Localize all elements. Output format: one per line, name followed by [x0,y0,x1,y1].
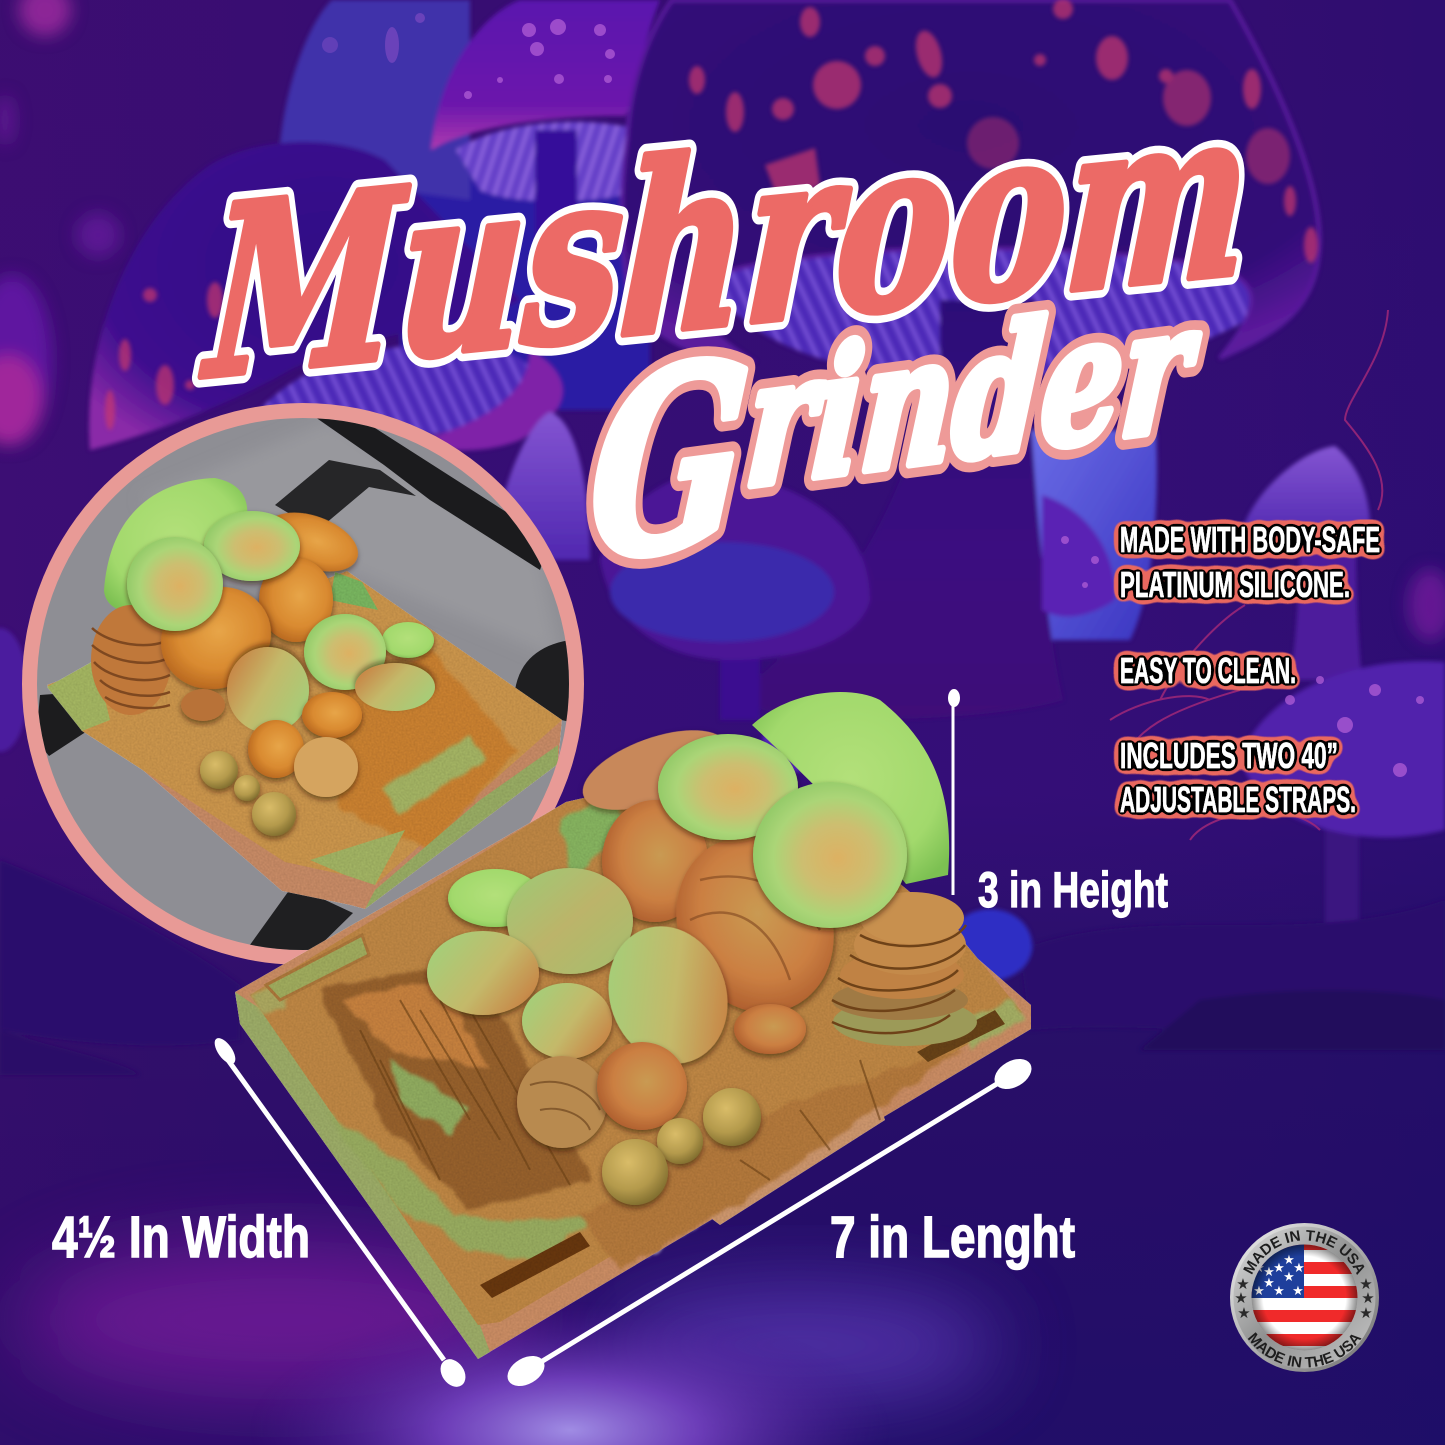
bokeh lights [0,0,1445,641]
inset mushroom cluster [91,478,435,836]
light blue stem [1030,430,1157,640]
inset slab [47,571,562,909]
right small mushroom [1042,495,1115,617]
badge: made in the USA: MADE IN THE USA [1248,1332,1362,1368]
title: Grinder [581,245,1207,618]
title: Mushroom: Mushroom [197,52,1257,432]
badge: made in the USA: ★ [1283,1270,1295,1285]
top middle stem and gills [456,122,640,201]
surface colour patches [250,790,1025,1270]
badge: made in the USA: ★ [1361,1289,1375,1307]
label: width: 4½ In Width [52,1205,310,1270]
badge: made in the USA: ★ [1359,1304,1373,1322]
badge: made in the USA: ★ [1234,1289,1248,1307]
title: Grinder: G [581,305,758,618]
badge: made in the USA: ★ [1292,1284,1304,1299]
feature list [1120,519,1380,820]
badge: made in the USA: ★ [1263,1245,1275,1260]
slab top surface [250,760,1022,1325]
mushroom stack at right [832,892,977,1046]
badge: made in the USA: ★ [1359,1275,1373,1293]
badge: made in the USA: ★ [1283,1253,1295,1268]
title: Grinder: G [581,305,758,618]
back and top caps [427,692,949,1205]
dimension line: height [948,689,960,895]
slab outer silhouette and side faces [235,760,1031,1359]
badge: made in the USA: ★ [1236,1275,1250,1293]
bark hatching [360,1000,880,1185]
top middle cap [431,0,660,150]
slots [266,935,369,1000]
badge: made in the USA: ★ [1263,1265,1275,1280]
left cap gills [250,344,536,440]
right small lavender mushroom [1290,530,1362,680]
badge: made in the USA: ★ [1273,1284,1285,1299]
main trunk [730,300,1063,719]
left edge mushrooms [0,628,28,752]
product inset circle [20,400,590,970]
feature: easy to clean: EASY TO CLEAN. [1120,650,1296,691]
badge: made in the USA: ★ [1237,1304,1251,1322]
big cap [622,0,1320,360]
blue distant cap [278,0,470,200]
cap spots [105,0,1318,430]
dimension line: length [502,1053,1037,1392]
straps [316,418,542,570]
badge: made in the USA: ★ [1253,1284,1265,1299]
label: length: 7 in Lenght [830,1205,1075,1270]
big cap gills [700,245,1290,375]
title: Grinder: rinder [740,263,1206,528]
title: Grinder: rinder [740,263,1206,528]
blue depth behind mushrooms [400,150,650,410]
label: height: 3 in Height [978,862,1168,918]
bottom glow [20,1240,540,1400]
badge: made in the USA: MADE IN THE USA [1243,1230,1364,1275]
main product: silicone grinder [235,692,1031,1359]
dimension line: width [211,1035,471,1392]
ground hills [0,860,1445,1045]
lower right cap [1325,820,1359,990]
title: Mushroom: Mushroom [197,52,1257,432]
left big cap [89,142,520,450]
badge: made in the USA: ★ [1273,1261,1285,1276]
badge: made in the USA [1230,1223,1379,1372]
badge: made in the USA: ★ [1293,1261,1305,1276]
center left lower mushroom [720,620,760,720]
badge: made in the USA: ★ [1263,1276,1275,1291]
badge: made in the USA: ★ [1253,1261,1265,1276]
red vines [1110,310,1388,840]
center purple mushroom behind title [495,412,590,560]
